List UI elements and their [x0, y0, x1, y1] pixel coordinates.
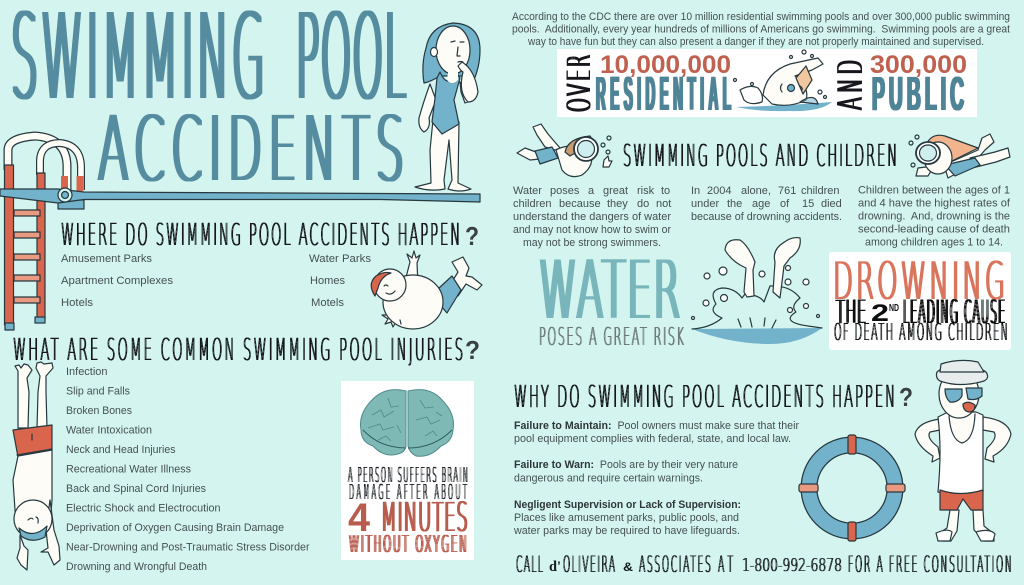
text: 300,000: 300,000	[870, 51, 967, 79]
text: 2004 statistic column: 15	[802, 198, 814, 210]
list: accident locations: Amusement Parks	[61, 253, 152, 265]
text: call to action: &	[623, 560, 633, 574]
text: water risk column: poses	[550, 185, 580, 197]
text: 2004 statistic column: the	[727, 198, 742, 210]
heading: swimming pools and children: SWIMMING POOLS AND CHILDREN	[623, 139, 897, 174]
panel: pool statistics banner	[557, 49, 977, 121]
heading: why do accidents happen: ?	[899, 382, 913, 412]
text: 2004 statistic column: age	[752, 198, 770, 210]
text: ages column: and 4 have the highest rates of	[858, 198, 1011, 210]
text: call to action: ASSOCIATES	[639, 551, 711, 577]
panel: brain damage callout	[341, 381, 474, 560]
text: call to action: CALL	[516, 551, 543, 577]
list: accident locations: Water Parks	[309, 253, 371, 265]
text: failure to maintain: pool equipment complies with federal, state, and local law.	[514, 433, 791, 445]
list: accident locations	[61, 253, 371, 309]
text: failure to maintain: Failure to Maintain: Pool owners must make sure that their	[514, 420, 799, 432]
text: negligent supervision: Places like amusement parks, public pools, and	[514, 512, 739, 524]
text: public: PUBLIC	[872, 67, 964, 121]
icon: brain	[360, 390, 454, 456]
panel: drowning callout	[829, 251, 1011, 350]
text: and: AND	[832, 60, 871, 110]
icon: girl on diving board	[415, 23, 480, 191]
icon: splash with feet	[692, 238, 822, 344]
text: ages column: among children ages 1 to 14.	[865, 236, 1003, 248]
text: 2004 statistic column: because of drowning accidents.	[691, 211, 842, 223]
text: introduction: way to have fun but they can also present a danger if they are not properly maintained and supervised.	[527, 36, 984, 48]
text: ages column	[858, 184, 1011, 248]
text: water risk column	[513, 185, 671, 249]
icon: life ring	[799, 435, 905, 541]
text: failure to warn	[514, 459, 738, 484]
text: water poses a great risk: POSES A GREAT RISK	[539, 322, 684, 351]
list: injuries: Neck and Head Injuries	[66, 444, 176, 456]
list: injuries	[66, 366, 310, 573]
list: accident locations: Hotels	[61, 297, 93, 309]
list: injuries: Broken Bones	[66, 405, 132, 417]
text: water risk column: may not be strong swimmers.	[523, 237, 661, 249]
text: ages column: Children between the ages of 1	[858, 184, 1010, 196]
text: 2004 statistic column: 2004	[707, 185, 731, 197]
text: ages column: second-leading cause of death	[858, 224, 1010, 236]
text: leading cause	[834, 293, 1008, 347]
text: call to action: FOR A FREE CONSULTATION	[848, 551, 1012, 577]
text: brain damage statement: A PERSON SUFFERS BRAIN	[348, 463, 468, 487]
list: accident locations: Apartment Complexes	[61, 275, 173, 287]
text: water risk column: they	[607, 198, 628, 210]
text: failure to maintain	[514, 420, 799, 445]
text: brain damage statement: DAMAGE AFTER ABOUT	[349, 480, 467, 504]
text: brain damage statement: WITHOUT OXYGEN	[349, 531, 467, 558]
text: ages column: drowning. And, drowning is the	[858, 210, 1010, 222]
text: water risk column: to	[661, 185, 670, 197]
text: negligent supervision: Negligent Supervision or Lack of Supervision:	[514, 499, 741, 511]
list: injuries: Near-Drowning and Post-Traumatic Stress Disorder	[66, 542, 310, 554]
text: negligent supervision: water parks may be required to have lifeguards.	[513, 525, 740, 537]
text: water risk column: a	[588, 185, 595, 197]
text: 2004 statistic column: children	[801, 185, 840, 197]
text: 2004 statistic column: under	[691, 198, 719, 210]
text: drowning: DROWNING	[833, 251, 1005, 312]
icon: ladder and diving board	[0, 136, 480, 330]
icon: diving boy	[371, 251, 482, 329]
text: brain damage statement	[348, 463, 468, 558]
text: 2004 statistic column: alone,	[741, 185, 771, 197]
text: failure to warn: Failure to Warn: Pools are by their very nature	[514, 459, 738, 471]
list: accident locations: Homes	[310, 275, 345, 287]
list: injuries: Slip and Falls	[66, 386, 130, 398]
text: call to action: 1-800-992-6878	[742, 555, 842, 576]
icon: snorkeling girl	[909, 134, 1010, 178]
list: injuries: Deprivation of Oxygen Causing Brain Damage	[66, 522, 284, 534]
list: injuries: Water Intoxication	[66, 424, 152, 436]
text: leading cause: 2	[871, 300, 889, 327]
text: call to action: OLIVEIRA	[563, 551, 615, 577]
list: injuries: Back and Spinal Cord Injuries	[66, 483, 206, 495]
list: injuries: Drowning and Wrongful Death	[66, 561, 207, 573]
text: water risk column: great	[603, 185, 628, 197]
text: leading cause: OF DEATH AMONG CHILDREN	[834, 320, 1008, 347]
list: injuries: Infection	[66, 366, 108, 378]
heading: where do accidents happen: ?	[465, 221, 479, 251]
text: introduction	[512, 11, 1010, 48]
text: 10,000,000: 10,000,000	[600, 51, 731, 79]
icon: lifeguard	[915, 360, 1011, 541]
heading: why do accidents happen: WHY DO SWIMMING POOL ACCIDENTS HAPPEN	[514, 380, 895, 415]
list: injuries: Electric Shock and Electrocution	[66, 502, 220, 514]
icon: upside-down boy	[13, 362, 60, 570]
text: leading cause: ND	[889, 303, 899, 314]
text: water risk column: Water	[513, 185, 542, 197]
text: water risk column: not	[656, 198, 671, 210]
title: ACCIDENTS	[98, 98, 404, 202]
text: call to action: d'	[549, 559, 561, 575]
text: failure to warn: dangerous and require certain warnings.	[514, 472, 703, 484]
text: water risk column: and may not know how to swim or	[513, 224, 671, 236]
text: water risk column: understand the dangers of water	[513, 211, 671, 223]
text: call to action: AT	[718, 551, 733, 577]
text: 2004 statistic column: In	[691, 185, 700, 197]
text: residential: RESIDENTIAL	[596, 68, 731, 121]
text: water risk column: do	[637, 198, 649, 210]
text: brain damage statement: MINUTES	[381, 495, 468, 541]
heading: where do accidents happen: WHERE DO SWIMMING POOL ACCIDENTS HAPPEN	[61, 218, 460, 253]
text: water risk column: children	[513, 198, 552, 210]
text: 2004 statistic column: died	[821, 198, 842, 210]
text: brain damage statement: 4	[348, 496, 371, 540]
title	[11, 0, 406, 202]
heading: common injuries: ?	[465, 335, 480, 365]
heading: common injuries: WHAT ARE SOME COMMON SWIMMING POOL INJURIES	[13, 333, 463, 368]
text: water poses a great risk: WATER	[539, 244, 680, 337]
text: over: OVER	[561, 55, 599, 112]
icon: swimmer	[734, 50, 832, 111]
text: 2004 statistic column: of	[780, 198, 790, 210]
icon: snorkeling boy	[517, 124, 612, 177]
text: call to action	[516, 551, 1012, 577]
list: injuries: Recreational Water Illness	[66, 464, 191, 476]
text: water risk column: risk	[637, 185, 655, 197]
text: negligent supervision	[513, 499, 741, 537]
text: 2004 statistic column: 761	[778, 185, 796, 197]
list: accident locations: Motels	[311, 297, 344, 309]
text: leading cause: LEADING CAUSE	[903, 294, 1005, 331]
text: water risk column: because	[559, 198, 601, 210]
text: leading cause: THE	[836, 293, 866, 331]
text: 2004 statistic column	[691, 185, 842, 223]
